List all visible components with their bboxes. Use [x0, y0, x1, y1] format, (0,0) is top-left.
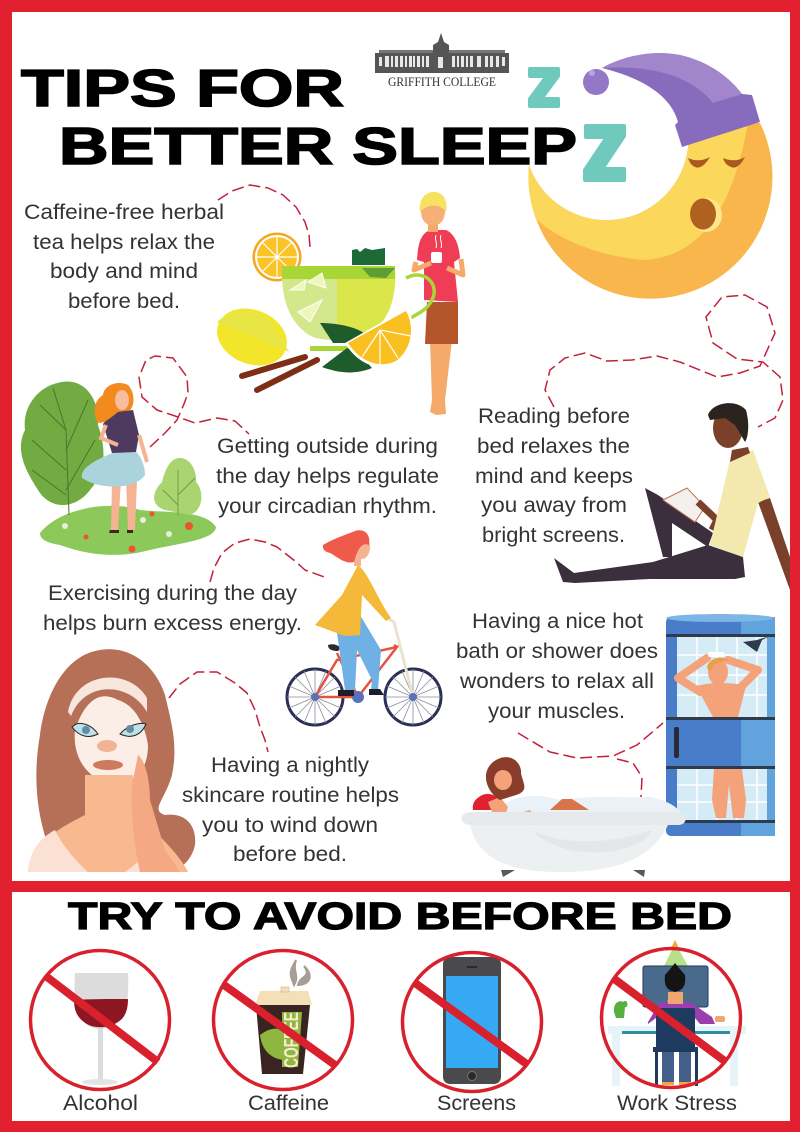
text: outdoors tip: the day helps regulate [216, 465, 439, 488]
logo: Griffith College [375, 33, 509, 89]
text: outdoors tip [216, 435, 439, 518]
dashed arrow: outdoors [139, 356, 249, 447]
dashed arrow: bath and shower [518, 723, 663, 797]
icon: sleeping moon with nightcap [520, 53, 772, 299]
text: skincare tip: Having a nightly [211, 754, 370, 777]
text: herbal tea tip: Caffeine-free herbal [24, 201, 224, 224]
text: reading tip: Reading before [478, 405, 630, 428]
illustration: shower cabin [666, 614, 775, 836]
text: reading tip: bed relaxes the [477, 435, 630, 458]
title: BETTER SLEEP [59, 118, 577, 176]
text: outdoors tip: your circadian rhythm. [218, 495, 437, 518]
text: shower tip: Having a nice hot [472, 610, 643, 633]
text: reading tip: mind and keeps [475, 465, 633, 488]
text: herbal tea tip [24, 201, 224, 313]
illustration: man reading [554, 403, 790, 590]
dashed arrow: tea [218, 185, 310, 247]
heading: try to avoid: TRY TO AVOID BEFORE BED [68, 896, 732, 938]
label: alcohol: Alcohol [63, 1092, 138, 1115]
text: shower tip: bath or shower does [456, 640, 658, 663]
text: herbal tea tip: body and mind [50, 260, 198, 283]
icon: large Z [585, 126, 624, 180]
illustration: man with cup [414, 192, 463, 415]
dashed arrow: skincare [169, 672, 268, 752]
text: reading tip: bright screens. [482, 524, 625, 547]
text: reading tip: you away from [481, 494, 627, 517]
illustration: woman in bathtub [462, 757, 686, 877]
text: exercise tip: Exercising during the day [48, 582, 298, 605]
illustration: woman with face mask [28, 649, 195, 872]
text: skincare tip: you to wind down [202, 814, 378, 837]
icon: phone crossed out [402, 952, 542, 1092]
icon: work desk crossed out [602, 940, 746, 1088]
icon: coffee crossed out: COFFEE [281, 1012, 303, 1068]
logo: Griffith College: GRIFFITH COLLEGE [388, 75, 496, 89]
text: skincare tip [182, 754, 399, 866]
icon: coffee crossed out [214, 950, 352, 1090]
text: herbal tea tip: before bed. [68, 290, 180, 313]
title [21, 60, 577, 176]
text: herbal tea tip: tea helps relax the [33, 231, 215, 254]
title: TIPS FOR [21, 60, 344, 118]
text: shower tip [456, 610, 658, 723]
text: shower tip: wonders to relax all [459, 670, 654, 693]
text: reading tip [475, 405, 633, 547]
icon: alcohol crossed out [30, 950, 170, 1090]
text: shower tip: your muscles. [488, 700, 625, 723]
text: exercise tip: helps burn excess energy. [43, 612, 302, 635]
text: skincare tip: before bed. [233, 843, 347, 866]
text: skincare tip: skincare routine helps [182, 784, 399, 807]
dashed arrow: reading [545, 295, 783, 427]
illustration: woman outdoors [21, 382, 216, 555]
illustration: cyclist [287, 530, 441, 725]
illustration: herbal tea [209, 232, 434, 390]
icon: small Z [530, 69, 558, 106]
dashed arrow: exercise [210, 539, 327, 582]
label: work stress: Work Stress [617, 1092, 737, 1115]
label: screens: Screens [437, 1092, 516, 1115]
label: caffeine: Caffeine [248, 1092, 329, 1115]
text: outdoors tip: Getting outside during [217, 435, 438, 458]
text: exercise tip [43, 582, 302, 635]
